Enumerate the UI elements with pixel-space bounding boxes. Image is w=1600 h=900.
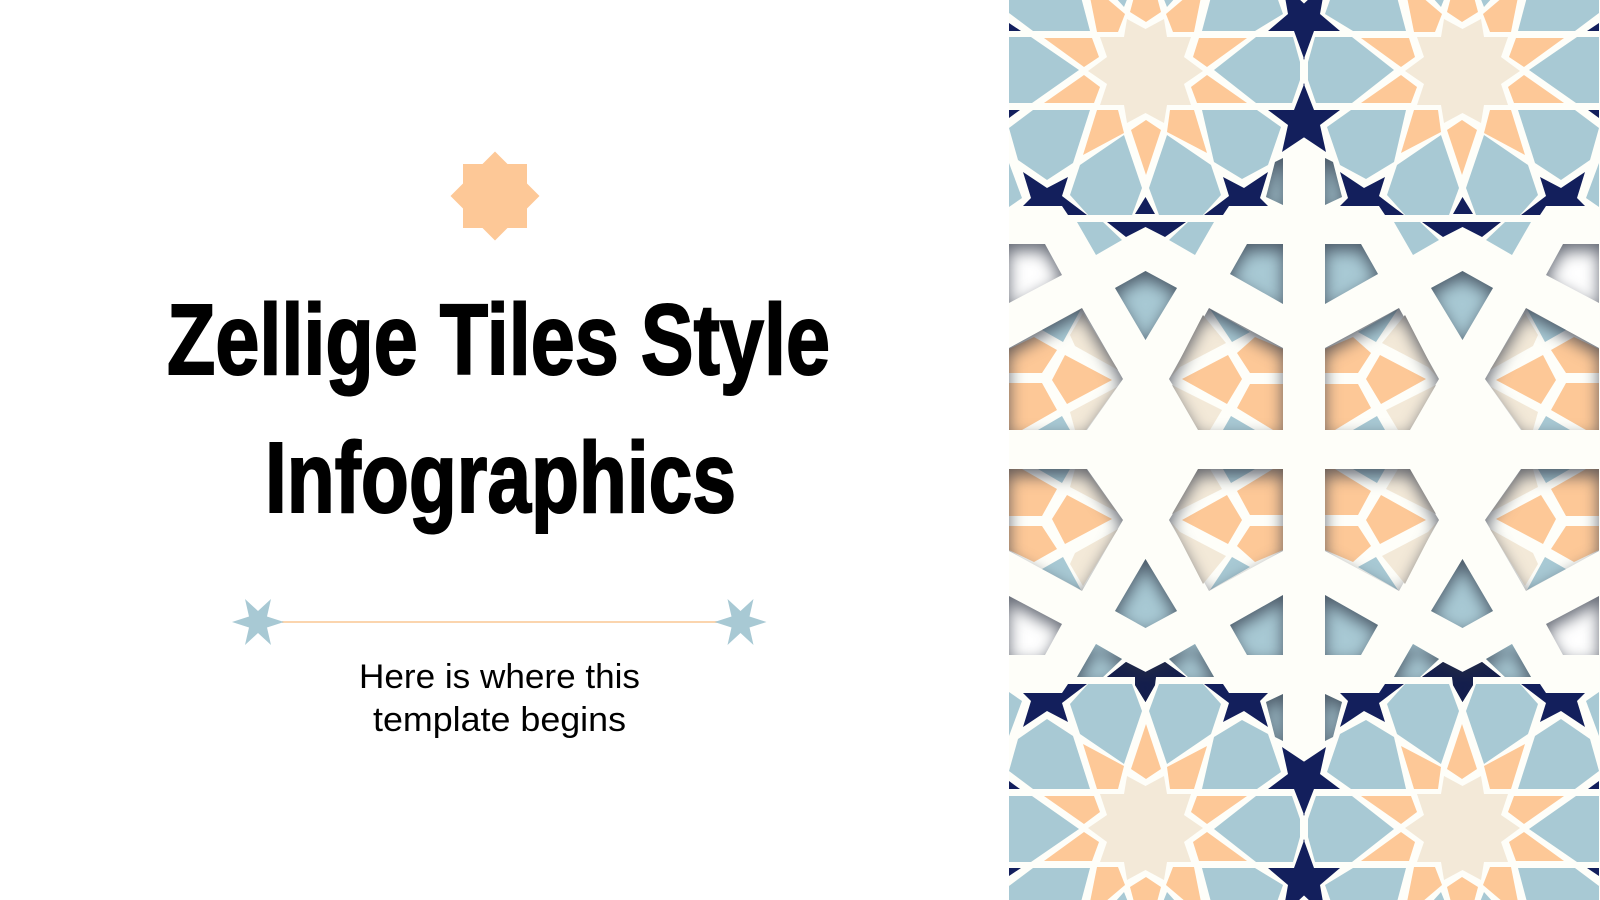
icon: orange eight-point star	[450, 152, 540, 240]
title: Zellige Tiles Style	[167, 284, 830, 396]
title	[167, 284, 830, 534]
divider with star ends	[232, 599, 766, 645]
panel: zellige tile pattern	[1009, 0, 1600, 900]
subtitle	[359, 658, 640, 739]
subtitle: template begins	[373, 701, 626, 739]
subtitle: Here is where this	[359, 658, 640, 696]
title: Infographics	[265, 422, 736, 534]
